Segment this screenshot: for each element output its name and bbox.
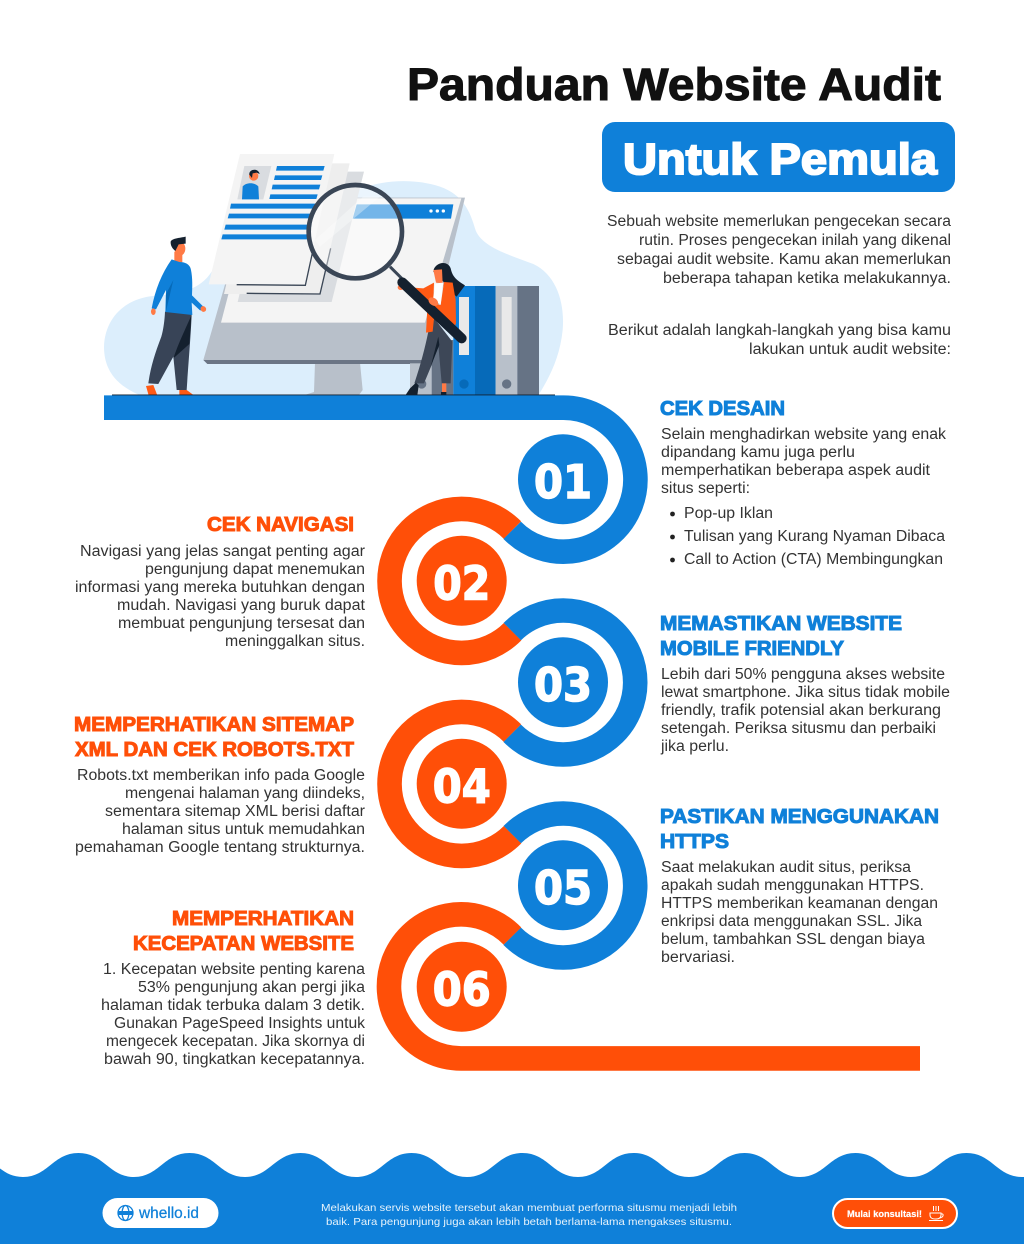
- body text: mengecek kecepatan. Jika skornya di: [106, 1033, 365, 1050]
- heading: MEMPERHATIKAN: [172, 908, 354, 930]
- number badge 03: 03: [534, 658, 592, 712]
- number badge 01: [518, 434, 608, 524]
- icon: coffee cup: [929, 1206, 943, 1220]
- panel: kecepatan website: [101, 908, 365, 1068]
- body text: Gunakan PageSpeed Insights untuk: [114, 1015, 365, 1032]
- body text: membuat pengunjung tersesat dan: [118, 615, 365, 632]
- title: Panduan Website Audit: [407, 59, 941, 110]
- woman: [398, 263, 465, 395]
- binders: [410, 286, 539, 395]
- bullet list: Tulisan yang Kurang Nyaman Dibaca: [684, 528, 945, 545]
- path segment 04: [390, 712, 513, 856]
- footer note: [321, 1202, 737, 1228]
- path segment 02: [390, 509, 513, 653]
- body text: friendly, trafik potensial akan berkurang: [661, 702, 941, 719]
- number badge 06: 06: [433, 962, 491, 1016]
- intro lead-in text: lakukan untuk audit website:: [749, 341, 951, 358]
- body text: halaman situs untuk memudahkan: [122, 821, 365, 838]
- intro text: Sebuah website memerlukan pengecekan secara: [607, 213, 951, 230]
- body text: setengah. Periksa situsmu dan perbaiki: [661, 720, 936, 737]
- body text: Saat melakukan audit situs, periksa: [661, 859, 911, 876]
- number badge 03: [518, 637, 608, 727]
- bullet list: Call to Action (CTA) Membingungkan: [684, 551, 943, 568]
- footer note: baik. Para pengunjung juga akan lebih betah berlama-lama mengakses situsmu.: [326, 1216, 732, 1228]
- body text: pengunjung dapat menemukan: [145, 561, 365, 578]
- body text: [661, 426, 946, 497]
- path segment 03: [512, 611, 635, 755]
- panel: https: [660, 806, 939, 966]
- body text: Navigasi yang jelas sangat penting agar: [80, 543, 365, 560]
- heading: [74, 714, 354, 761]
- heading: CEK NAVIGASI: [207, 514, 354, 536]
- illustration: people inspecting a website with a magnifier: [104, 154, 563, 395]
- heading: PASTIKAN MENGGUNAKAN: [660, 806, 939, 828]
- path segment 06: [389, 914, 920, 1058]
- body text: informasi yang mereka butuhkan dengan: [75, 579, 365, 596]
- number badge 02: 02: [433, 556, 490, 610]
- heading: HTTPS: [660, 831, 729, 853]
- bullet list: Pop-up Iklan: [684, 505, 773, 522]
- heading: MEMASTIKAN WEBSITE: [660, 613, 902, 635]
- panel: cek desain: [660, 398, 946, 568]
- intro text: sebagai audit website. Kamu akan memerlukan: [617, 251, 951, 268]
- path segment 01: [104, 408, 635, 552]
- intro lead-in text: [608, 322, 951, 358]
- woman's hand: [427, 296, 440, 308]
- body text: 53% pengunjung akan pergi jika: [138, 979, 365, 996]
- body text: Lebih dari 50% pengguna akses website: [661, 666, 945, 683]
- footer note: Melakukan servis website tersebut akan membuat performa situsmu menjadi lebih: [321, 1202, 737, 1214]
- number badge 05: 05: [534, 861, 592, 915]
- brand name: whello.id: [138, 1205, 199, 1222]
- intro text: [607, 213, 951, 287]
- body text: dipandang kamu juga perlu: [661, 444, 855, 461]
- heading: CEK DESAIN: [660, 398, 785, 420]
- number badge 02: [417, 536, 507, 626]
- document pages: [209, 154, 364, 302]
- body text: memperhatikan beberapa aspek audit: [661, 462, 931, 479]
- number badge 04: [417, 739, 507, 829]
- number badge 04: 04: [433, 760, 491, 814]
- body text: jika perlu.: [660, 738, 729, 755]
- footer: [0, 1153, 1024, 1244]
- intro lead-in text: Berikut adalah langkah-langkah yang bisa kamu: [608, 322, 951, 339]
- heading: MEMPERHATIKAN SITEMAP: [74, 714, 354, 736]
- body text: [75, 767, 365, 856]
- body text: 1. Kecepatan website penting karena: [103, 961, 365, 978]
- bullet list: [670, 505, 945, 568]
- magnifying glass: [309, 185, 462, 338]
- heading: [660, 613, 902, 660]
- body text: bervariasi.: [661, 949, 735, 966]
- intro text: rutin. Proses pengecekan inilah yang dikenal: [639, 232, 951, 249]
- heading: [133, 908, 354, 955]
- body text: [660, 666, 950, 755]
- body text: bawah 90, tingkatkan kecepatannya.: [104, 1051, 365, 1068]
- number badge 06: [417, 942, 507, 1032]
- body text: sementara sitemap XML berisi daftar: [105, 803, 365, 820]
- body text: Robots.txt memberikan info pada Google: [77, 767, 365, 784]
- body text: [661, 859, 938, 966]
- path segment 05: [512, 814, 635, 958]
- body text: Selain menghadirkan website yang enak: [661, 426, 946, 443]
- icon: globe: [118, 1206, 133, 1220]
- illustration ground line: [112, 394, 555, 396]
- panel: mobile friendly: [660, 613, 950, 755]
- monitor: [203, 197, 465, 395]
- body text: belum, tambahkan SSL dengan biaya: [661, 931, 925, 948]
- logo pill: [102, 1198, 218, 1228]
- body text: [75, 543, 366, 650]
- consult button: Mulai konsultasi!: [847, 1209, 922, 1220]
- background blob: [104, 181, 563, 395]
- body text: lewat smartphone. Jika situs tidak mobile: [661, 684, 950, 701]
- heading: [660, 806, 939, 853]
- consult button: [833, 1199, 957, 1228]
- panel: cek navigasi: [75, 514, 366, 650]
- man: [146, 237, 207, 395]
- body text: HTTPS memberikan keamanan dengan: [661, 895, 938, 912]
- body text: pemahaman Google tentang strukturnya.: [75, 839, 365, 856]
- number badge 05: [518, 840, 608, 930]
- body text: [101, 961, 365, 1068]
- subtitle badge: [602, 122, 955, 192]
- panel: sitemap and robots: [74, 714, 365, 856]
- heading: MOBILE FRIENDLY: [660, 638, 845, 660]
- body text: mengenai halaman yang diindeks,: [125, 785, 365, 802]
- body text: mudah. Navigasi yang buruk dapat: [117, 597, 366, 614]
- body text: apakah sudah menggunakan HTTPS.: [661, 877, 924, 894]
- body text: situs seperti:: [661, 480, 750, 497]
- timeline path: steps 01 to 06: [104, 408, 920, 1058]
- intro text: beberapa tahapan ketika melakukannya.: [663, 270, 951, 287]
- body text: halaman tidak terbuka dalam 3 detik.: [101, 997, 365, 1014]
- heading: XML DAN CEK ROBOTS.TXT: [75, 739, 354, 761]
- footer wave background: [0, 1153, 1024, 1244]
- number badge 01: 01: [534, 455, 592, 509]
- heading: KECEPATAN WEBSITE: [133, 933, 354, 955]
- subtitle badge: Untuk Pemula: [623, 135, 938, 184]
- body text: meninggalkan situs.: [225, 633, 365, 650]
- body text: enkripsi data menggunakan SSL. Jika: [661, 913, 922, 930]
